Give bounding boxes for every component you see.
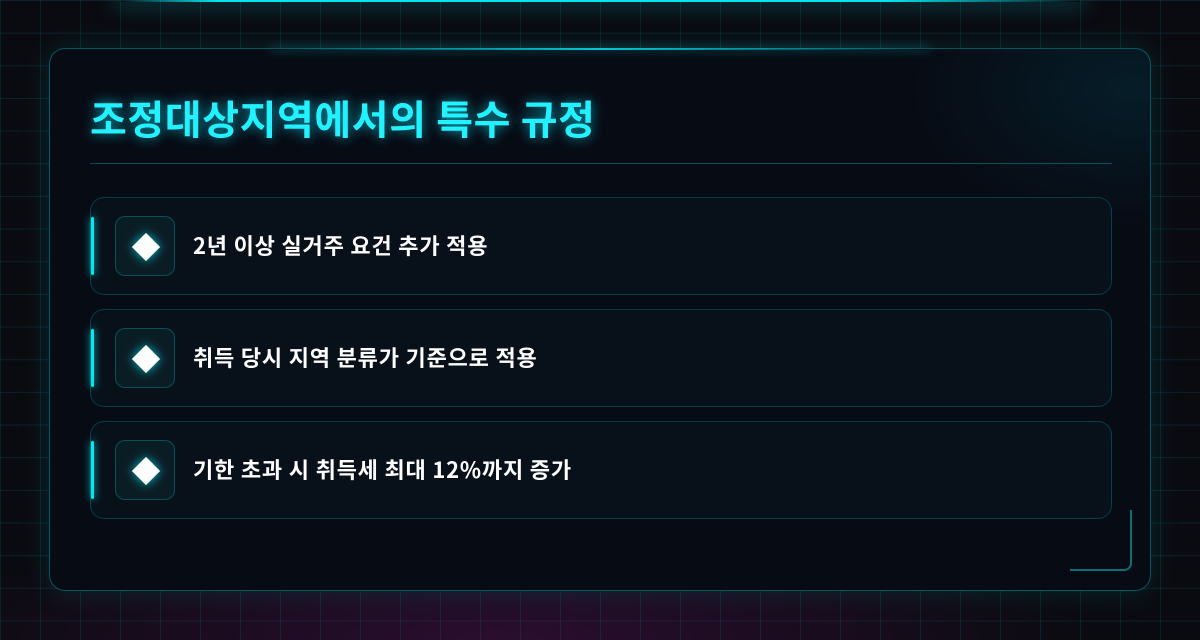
item 1: [90, 197, 1112, 295]
text 1: 2년 이상 실거주 요건 추가 적용: [193, 229, 488, 261]
top glow bar: [120, 0, 1080, 2]
icon: diamond: [115, 328, 175, 388]
icon: diamond: [115, 216, 175, 276]
text 3: 기한 초과 시 취득세 최대 12%까지 증가: [193, 453, 572, 485]
title: 조정대상지역에서의 특수 규정: [90, 88, 596, 146]
panel: main: [49, 48, 1151, 591]
item 3: [90, 421, 1112, 519]
text 2: 취득 당시 지역 분류가 기준으로 적용: [193, 341, 538, 373]
item 2: [90, 309, 1112, 407]
icon: diamond: [115, 440, 175, 500]
corner bracket: [1070, 510, 1132, 571]
